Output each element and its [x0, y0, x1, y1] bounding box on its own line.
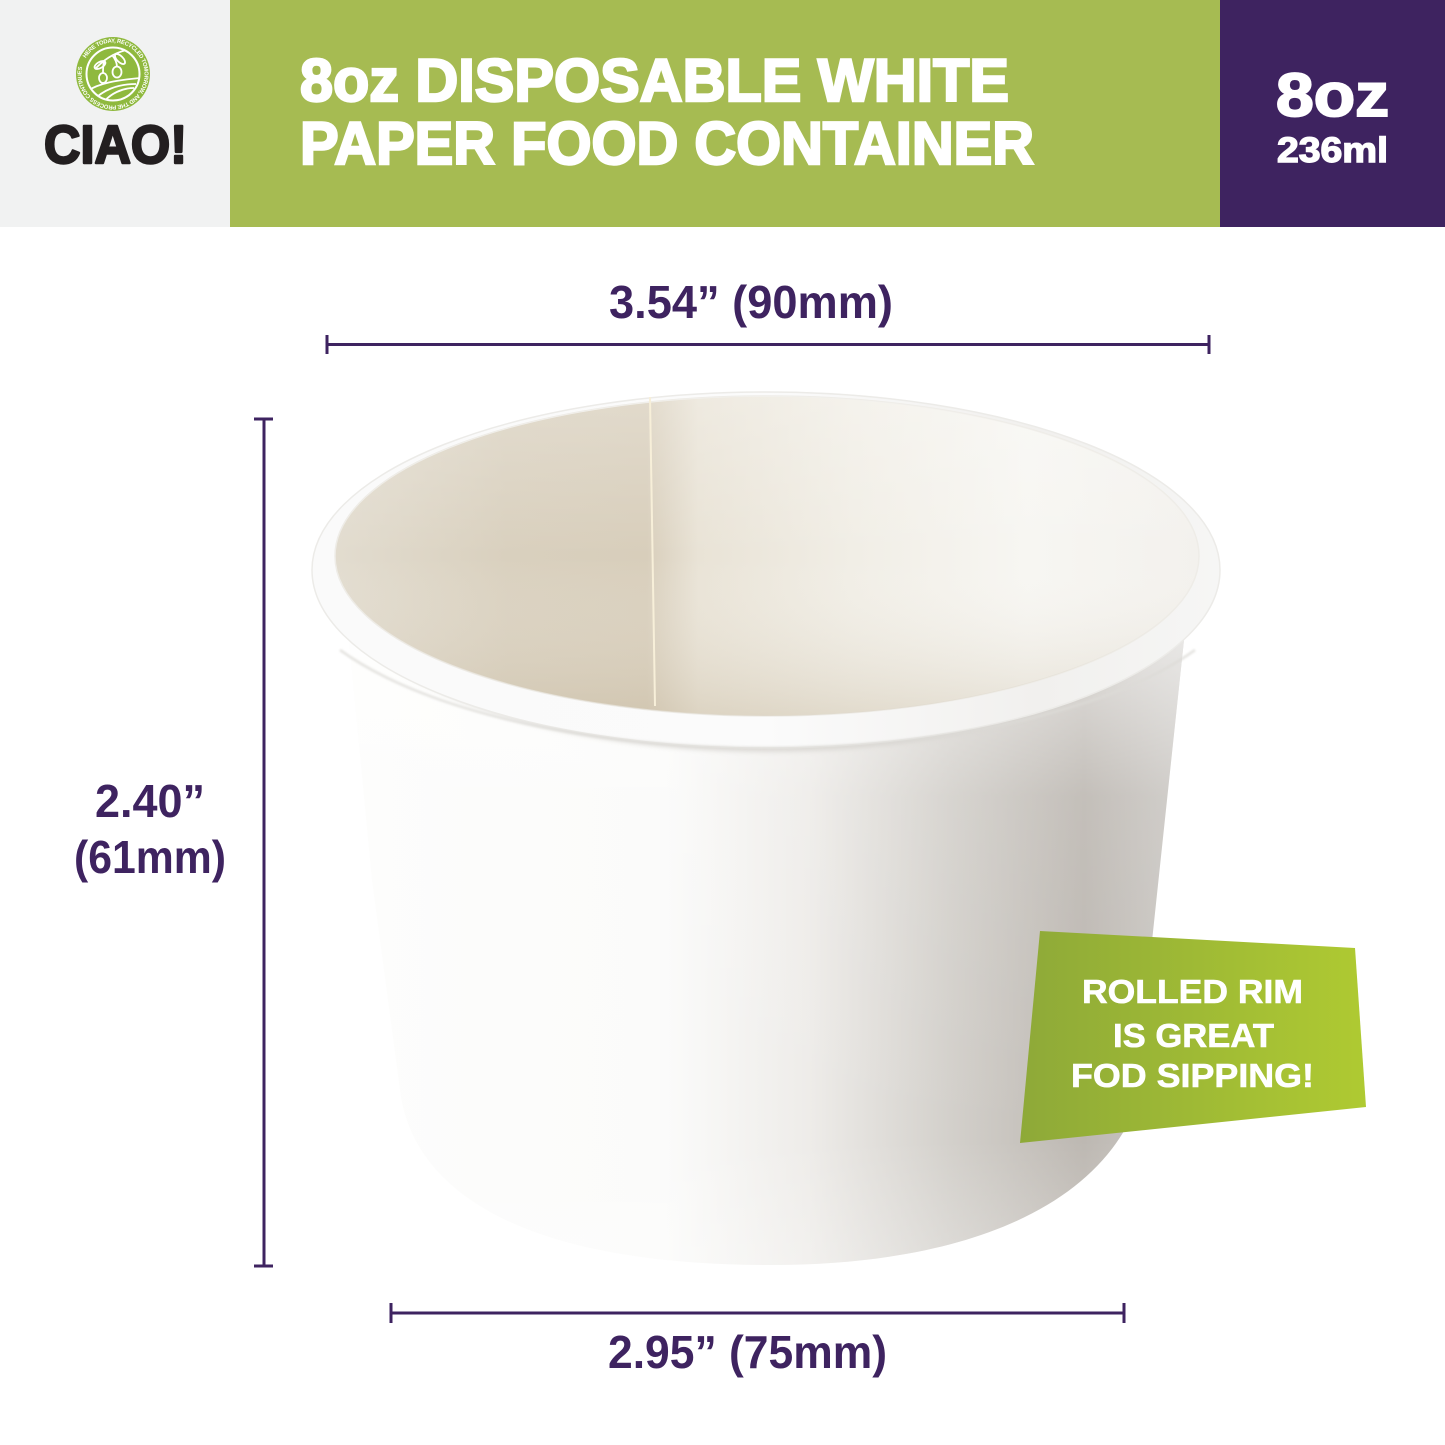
cup body	[349, 640, 1184, 1265]
title	[300, 47, 1034, 177]
dimension: height: (61mm)	[74, 831, 226, 883]
capacity in millilitres: 236ml	[1277, 131, 1388, 170]
dimension: top width	[327, 276, 1209, 354]
dimension: height: 2.40”	[95, 775, 205, 827]
dimension: base width: 2.95” (75mm)	[608, 1326, 887, 1378]
title: 8oz DISPOSABLE WHITE	[300, 47, 1009, 114]
header: title panel	[230, 0, 1220, 227]
capacity in ounces: 8oz	[1276, 61, 1389, 129]
callout: rolled rim: IS GREAT	[1113, 1017, 1274, 1054]
title: PAPER FOOD CONTAINER	[300, 110, 1034, 177]
rim shadow	[328, 396, 1208, 752]
paper cup	[312, 392, 1220, 1265]
rolled rim	[312, 392, 1220, 748]
brand name: CIAO!	[44, 115, 187, 175]
cup interior	[335, 396, 1199, 716]
dimension: height	[74, 419, 273, 1266]
header: logo panel	[0, 0, 230, 227]
callout: rolled rim	[1020, 931, 1366, 1143]
callout: rolled rim: ROLLED RIM	[1082, 973, 1303, 1010]
dimension: top width: 3.54” (90mm)	[609, 276, 893, 328]
icon: round green logo badge: HERE TODAY, RECYCLED TOMORROW, AND THE PROCESS CONTINUES	[77, 38, 149, 110]
header: capacity panel	[1220, 0, 1445, 227]
dimension: base width	[391, 1303, 1124, 1378]
callout: rolled rim: FOD SIPPING!	[1071, 1057, 1314, 1094]
